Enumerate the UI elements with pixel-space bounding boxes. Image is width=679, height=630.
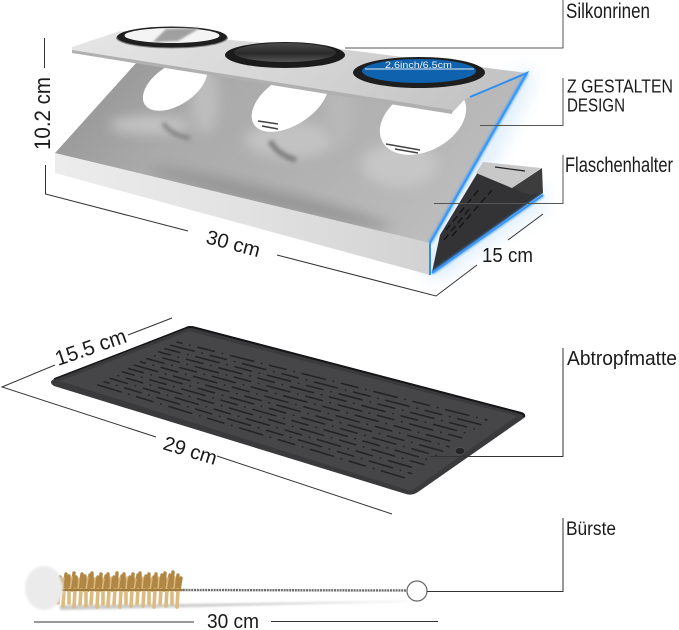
leader line: Bürste	[427, 518, 563, 592]
bottle brush	[25, 566, 427, 610]
drip mat	[51, 326, 525, 495]
dimension: 30 cm stand: 30 cm	[204, 227, 263, 262]
leader line: Flaschenhalter	[434, 155, 563, 204]
stand: Z-shaped bottle holder	[55, 26, 543, 275]
silicone ring right with blue insert	[353, 57, 485, 88]
diameter text: 2.6inch/6.5cm	[385, 60, 452, 71]
leader line: Abtropfmatte	[430, 348, 563, 456]
front base edge	[55, 153, 430, 275]
leader line: Silkonrinen	[345, 0, 563, 48]
dimension: 30 cm stand	[46, 165, 477, 296]
dimension: 10.2 cm: 10.2 cm	[30, 77, 55, 150]
silicone ring left	[116, 26, 228, 48]
brass bristles	[58, 572, 182, 607]
slanted metal body	[55, 62, 527, 243]
leader line: Z design	[480, 78, 563, 126]
white cotton tip	[25, 566, 63, 610]
dimension: 29 cm	[161, 433, 392, 514]
blue glow behind stand	[430, 73, 543, 272]
label: Bürste: Bürste	[566, 519, 616, 540]
mat tab hole	[455, 448, 465, 454]
silicone ring middle	[225, 42, 345, 68]
wire handle	[180, 589, 407, 592]
label: Z GESTALTEN DESIGN: DESIGN	[567, 96, 625, 116]
drip tray inside stand	[432, 162, 543, 272]
label: Abtropfmatte: Abtropfmatte	[567, 348, 677, 370]
dimension: 10.2 cm	[30, 38, 55, 150]
label: Silkonrinen: Silkonrinen	[566, 0, 650, 23]
dimension: 15 cm: 15 cm	[482, 245, 533, 267]
dimension: 15.5 cm	[2, 318, 172, 437]
tube shading on body	[110, 66, 438, 237]
dimension: 15.5 cm: 15.5 cm	[52, 325, 130, 371]
bottle holes	[134, 49, 478, 169]
mat drainage slots	[98, 342, 487, 478]
handle loop	[407, 581, 427, 601]
brush shadow	[60, 601, 420, 610]
blue edge highlights	[430, 73, 543, 275]
blue edge glow	[430, 73, 543, 273]
dimension: 15 cm	[482, 214, 543, 267]
dimension: 29 cm: 29 cm	[161, 433, 220, 470]
top plate	[72, 31, 527, 113]
label: Z GESTALTEN DESIGN	[567, 76, 673, 116]
